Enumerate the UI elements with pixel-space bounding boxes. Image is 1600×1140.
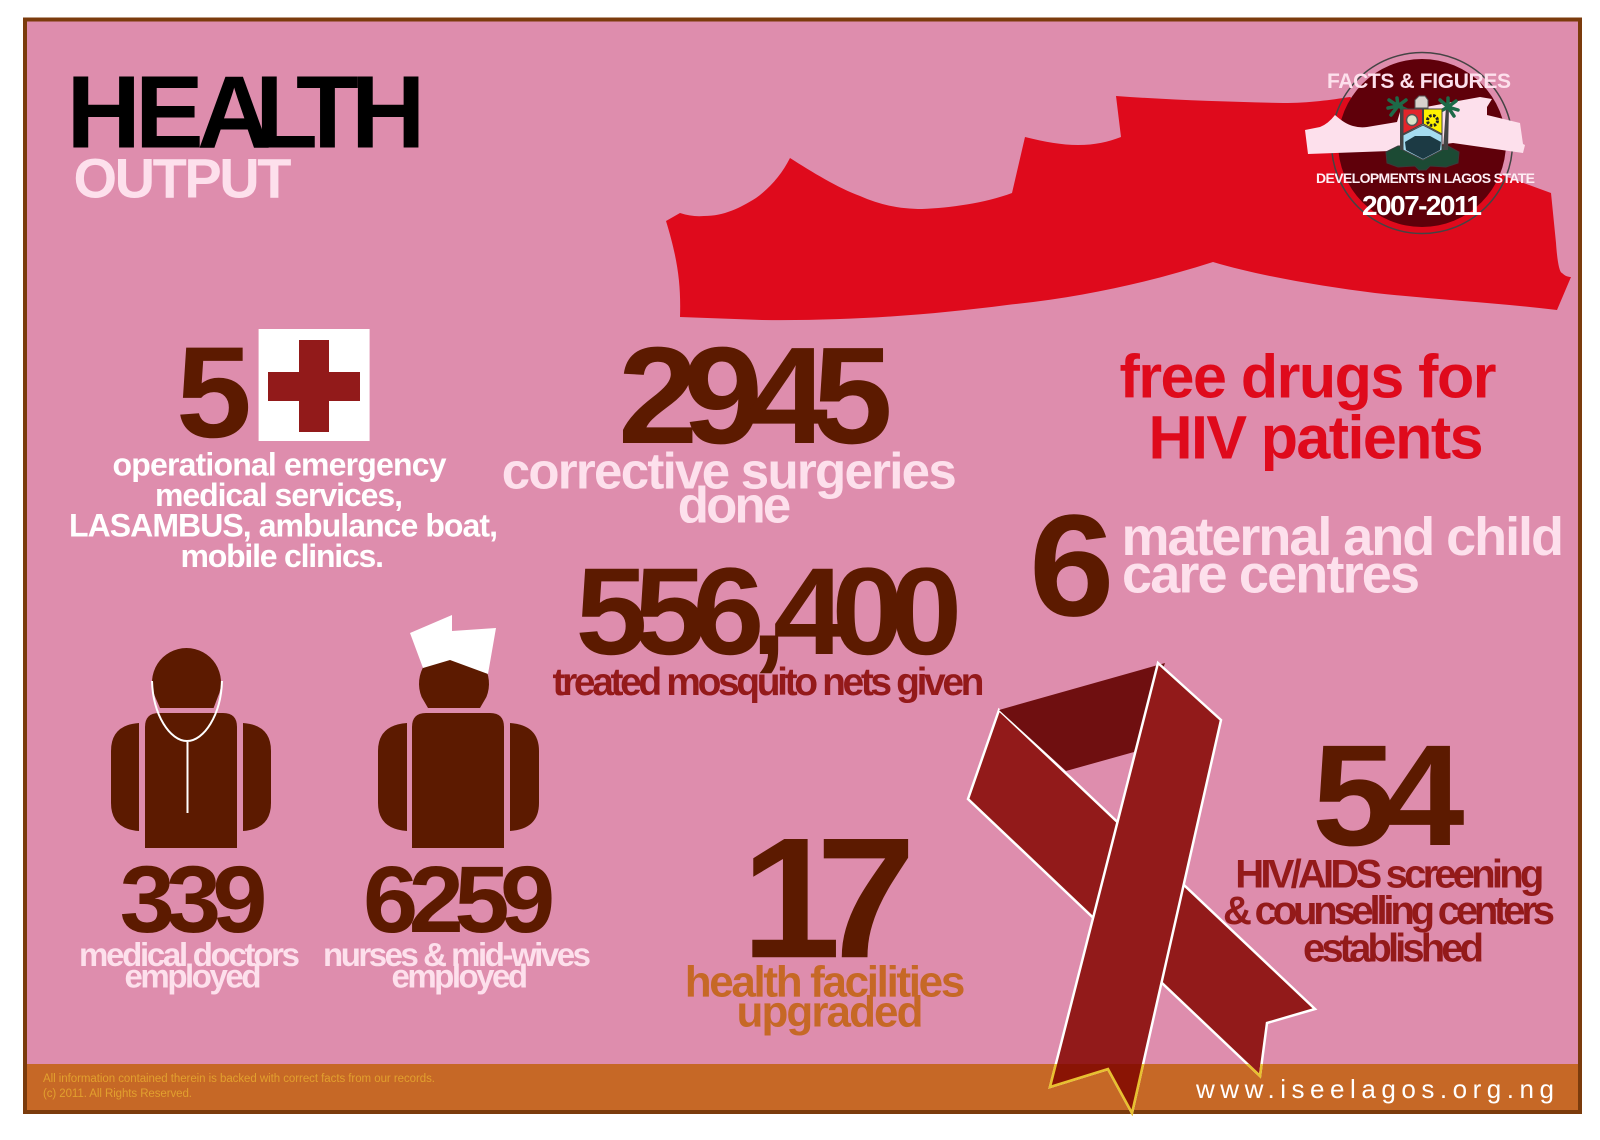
logo: facts and figures badge: 2007-2011 [1362,190,1482,221]
stat: 5 emergency services [69,320,498,574]
description: operational emergency [112,446,447,482]
stat: 2945 surgeries: corrective surgeries [502,442,957,499]
description: medical services, [155,477,403,513]
stat: 6 care centres [1029,484,1564,647]
stat: 6 care centres: care centres [1122,544,1420,604]
footer disclaimer: (c) 2011. All Rights Reserved. [43,1088,192,1100]
description: mobile clinics. [180,538,384,574]
icon: nurse [378,615,539,848]
stat: 2945 surgeries [502,318,957,534]
badge text: FACTS & FIGURES [1327,70,1511,93]
description [69,446,498,574]
callout: free drugs: free drugs for [1120,343,1496,411]
mini map [1305,97,1525,154]
stat: 6 care centres: maternal and child [1122,507,1564,567]
stat: 17 facilities [685,803,965,1037]
stat: 17 facilities: upgraded [736,988,924,1037]
stat: 54 screening centers: established [1303,927,1484,971]
callout: free drugs: HIV patients [1148,403,1484,471]
map of Lagos in red [666,96,1571,320]
shield [1403,109,1422,134]
nurse cap [410,615,496,674]
stat: 2945 surgeries: done [678,476,791,534]
icon: doctor [111,648,271,848]
title: OUTPUT [74,146,292,209]
stat: 54 screening centers: 54 [1312,716,1465,876]
stat: 6 care centres: 6 [1029,484,1114,647]
stat: 6259 nurses [323,846,591,994]
stat: 339 doctors: employed [124,957,262,994]
stat: 54 screening centers: HIV/AIDS screening [1235,853,1544,897]
stat: 6259 nurses: nurses & mid-wives [323,936,591,973]
icon: AIDS ribbon [968,663,1315,1113]
website url: www.iseelagos.org.ng [1195,1074,1554,1104]
title: HEALTH [66,54,425,169]
stat: 54 screening centers [1223,716,1555,971]
stat: 5 emergency services: 5 [176,320,252,465]
stat: 556,400 nets: 556,400 [576,542,962,680]
footer disclaimer: All information contained therein is backed with correct facts from our records. [43,1073,435,1085]
stat: 54 screening centers: & counselling centers [1223,889,1555,933]
icon: red cross [259,329,370,441]
building [1415,96,1428,108]
description: LASAMBUS, ambulance boat, [69,508,498,544]
stat: 556,400 nets: treated mosquito nets given [552,661,984,704]
footer band [27,1064,1578,1110]
footer disclaimer [43,1073,435,1100]
base scroll [1386,146,1459,170]
stat: 339 doctors: medical doctors [79,936,300,973]
stat: 17 facilities: health facilities [685,958,965,1007]
stat: 339 doctors [79,846,300,994]
stat: 17 facilities: 17 [741,803,916,994]
palm trunks [1400,105,1449,150]
coat of arms [1386,96,1459,170]
stat: 6259 nurses: 6259 [363,846,555,953]
logo: facts and figures badge: DEVELOPMENTS IN LAGOS STATE [1316,170,1535,186]
stat: 6259 nurses: employed [392,957,528,994]
logo: facts and figures badge [1305,52,1535,234]
callout: free drugs [1120,343,1496,471]
palm fronds [1388,98,1458,116]
stat: 2945 surgeries: 2945 [618,318,893,472]
stat: 339 doctors: 339 [120,846,267,953]
